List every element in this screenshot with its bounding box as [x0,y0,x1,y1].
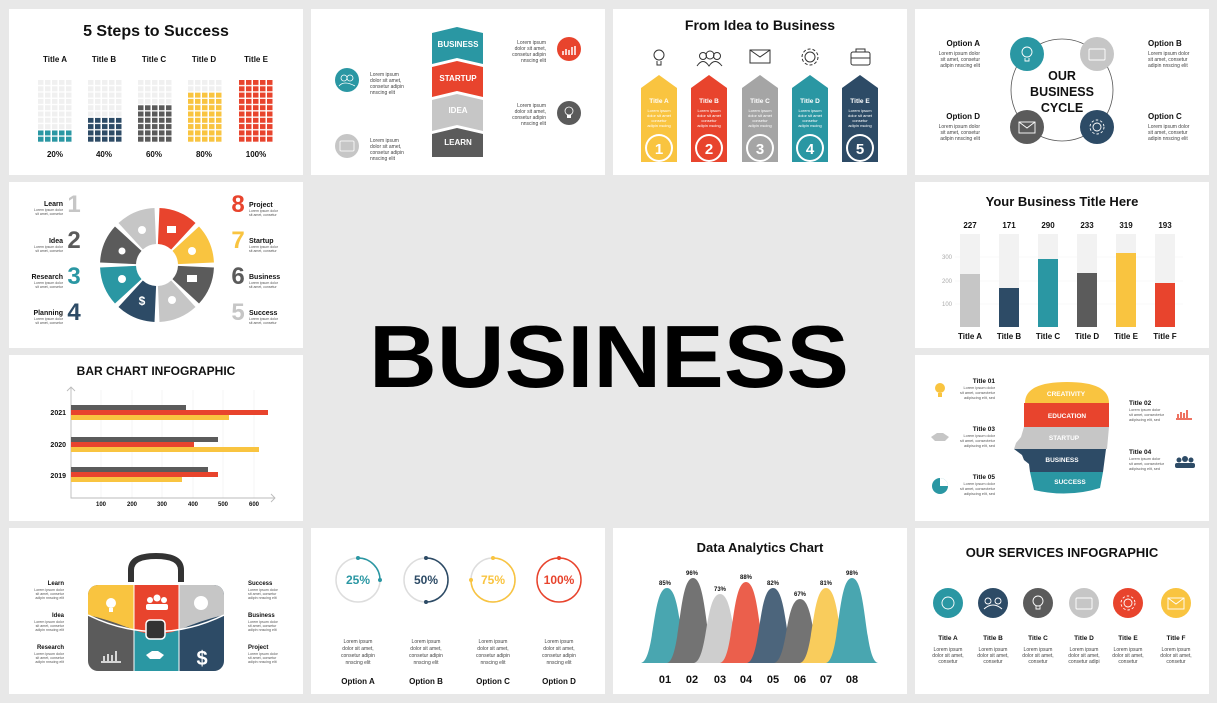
arrow columns: dolor sit amet [848,113,873,118]
panel: our services infographic: Lorem ipsum [979,647,1007,653]
panel: head infographic: Lorem ipsum dolor [1129,457,1161,461]
panel: your business title bar chart: 200 [942,279,953,285]
panel: briefcase: sit amet, consetur [248,656,277,660]
service icons [933,588,1191,618]
arrow columns: Lorem ipsum [848,108,872,113]
panel: data analytics chart: Data Analytics Chart [697,540,824,555]
panel: gear steps: Lorem ipsum dolor [34,208,64,212]
panel: our services infographic: Title A [938,635,958,642]
panel: head infographic [915,355,1209,521]
panel: gear steps: sit amet, consetur [249,285,277,289]
panel: percent rings: dolor sit amet, [477,646,509,652]
panel: business cycle: sit amet, consetur [941,57,980,63]
arrow columns: adipin nscing [647,123,671,128]
column titles [43,55,269,64]
panel: gear steps: sit amet, consetur [249,249,277,253]
panel: bar chart infographic [9,355,303,521]
panel: your business title bar chart: Title E [1114,332,1139,341]
panel: bar chart infographic: 200 [127,502,138,508]
labels [37,581,275,651]
panel: data analytics chart [613,528,907,694]
text blocks [370,72,404,96]
panel: percent rings: Option A [341,677,375,686]
head bands: STARTUP [1049,435,1080,442]
arrow columns: 5 [856,141,864,158]
panel: our services infographic: consetur adipi [1068,659,1100,665]
panel: percent rings: nnscing elit [480,660,506,666]
options: Option C [1148,112,1182,121]
labels: Learn [48,581,64,587]
panel: percent rings: 25% [346,573,370,587]
panel: gear steps: sit amet, consetur [35,212,64,216]
panel: chevron stack: dolor sit amet, [515,46,546,52]
panel: 5 steps to success [9,9,303,175]
column titles: Title D [192,55,216,64]
labels: Research [31,274,63,281]
panel: data analytics chart: 88% [740,575,753,581]
square grids [38,80,274,143]
chevrons: IDEA [448,106,468,115]
panel: head infographic: Lorem ipsum dolor [964,386,996,390]
heading: 5 steps: 5 Steps to Success [83,23,229,40]
arrow columns: dolor sit amet [647,113,672,118]
bars [71,405,268,482]
panel: briefcase: Lorem ipsum dolor [34,588,65,592]
labels: Startup [249,238,274,245]
panel: our services infographic: dolor sit amet, [1112,653,1144,659]
percent labels: 40% [96,150,112,159]
panel: data analytics chart: 04 [740,674,753,686]
panel: percent rings: Lorem ipsum [545,639,573,645]
line icons [654,49,870,66]
panel: head infographic: Lorem ipsum dolor [964,482,996,486]
handle [131,556,181,582]
labels: Business [248,613,275,619]
numbers left: 4 [67,299,81,326]
column titles: Title A [43,55,67,64]
text blocks: dolor sit amet, [370,78,401,84]
panel: percent rings: consetur adipin [476,653,510,659]
panel: head infographic: sit amet, consectetur [1129,462,1165,466]
panel: percent rings: consetur adipin [409,653,443,659]
briefcase body [88,585,224,671]
arrow columns: consetur [802,118,818,123]
numbers left: 7 [231,227,245,254]
options: Option A [947,39,980,48]
icon: people teal [335,68,359,92]
briefcase body: $ [196,648,208,670]
panel: business cycle: adipin nnscing elit [940,63,981,69]
arrow columns: adipin nscing [697,123,721,128]
panel: gear steps: Lorem ipsum dolor [34,281,64,285]
panel: gear steps: Lorem ipsum dolor [34,317,64,321]
panel: business cycle: adipin nnscing elit [1148,63,1188,69]
panel: percent rings: dolor sit amet, [410,646,442,652]
panel: bar chart infographic: 300 [157,502,168,508]
panel: business cycle: Lorem ipsum dolor [939,51,980,57]
panel: our services infographic: consetur [938,659,958,665]
panel: percent rings: consetur adipin [542,653,576,659]
panel: business cycle: Lorem ipsum dolor [1148,124,1190,130]
panel: briefcase: Lorem ipsum dolor [248,588,279,592]
panel: data analytics chart: 07 [820,674,832,686]
panel: business cycle: adipin nnscing elit [940,136,981,142]
panel: percent rings: 50% [414,573,438,587]
options: Option D [946,112,980,121]
icons [935,383,945,397]
panel: business cycle: sit amet, consetur [1148,57,1188,63]
chevrons: LEARN [444,138,472,147]
icon: chart red [557,37,581,61]
icon: bulb dark [557,101,581,125]
panel: your business title bar chart: Your Business Title Here [986,194,1138,209]
panel: our services infographic: Lorem ipsum [1070,647,1098,653]
panel: briefcase [9,528,303,694]
rings [336,558,581,602]
panel: business cycle: Lorem ipsum dolor [1148,51,1190,57]
panel: percent rings: nnscing elit [345,660,371,666]
panel: chevron stack: nnscing elit [521,58,547,64]
head bands: EDUCATION [1048,413,1086,420]
arrow columns: adipin nscing [748,123,772,128]
panel: your business title bar chart: 100 [942,302,953,308]
panel: data analytics chart: 82% [767,581,780,587]
panel: from idea to business [613,9,907,175]
panel: your business title bar chart: Title D [1075,332,1099,341]
head bands: BUSINESS [1045,457,1079,464]
panel: head infographic: sit amet, consectetur [1129,413,1165,417]
panel: our services infographic: dolor sit amet, [1068,653,1100,659]
panel: data analytics chart: 85% [659,581,672,587]
panel: chevron stack: dolor sit amet, [370,144,401,150]
labels: Business [249,274,280,281]
cycle title: CYCLE [1041,101,1083,115]
head bands [1014,382,1109,494]
panel: chevron stack: nnscing elit [370,156,396,162]
panel: briefcase: sit amet, consetur [248,624,277,628]
panel: head infographic: sit amet, consectetur [960,391,996,395]
arrow columns: consetur [651,118,667,123]
percent labels: 60% [146,150,162,159]
panel: our services infographic: consetur [1028,659,1048,665]
panel: bar chart infographic: 2019 [50,473,66,480]
panel: percent rings [311,528,605,694]
panel: your business title bar chart: Title C [1036,332,1060,341]
panel: percent rings: Lorem ipsum [412,639,440,645]
columns [960,234,1175,327]
head bands: CREATIVITY [1047,391,1086,398]
numbers left: 8 [231,191,245,218]
numbers left: 6 [231,263,245,290]
arrow columns: Lorem ipsum [748,108,772,113]
icon: briefcase gray [335,134,359,158]
panel: percent rings: nnscing elit [546,660,572,666]
panel: our services infographic: consetur [1166,659,1186,665]
panel: our services infographic: Title D [1074,635,1094,642]
panel: our services infographic: consetur [1118,659,1138,665]
panel: percent rings: Lorem ipsum [479,639,507,645]
panel: gear steps: sit amet, consetur [35,249,64,253]
panel: your business title bar chart: 227 [963,221,977,230]
labels: Success [249,310,278,317]
panel: our services infographic [915,528,1209,694]
column titles: Title E [244,55,269,64]
panel: business cycle: adipin nnscing elit [1148,136,1188,142]
center: BUSINESS title: BUSINESS [369,307,849,406]
panel: head infographic: adipiscing elit, sed [1129,467,1160,471]
panel: your business title bar chart: 300 [942,255,953,261]
arrow columns: 1 [655,141,663,158]
panel: percent rings: 100% [544,573,575,587]
panel: business cycle: sit amet, consetur [1148,130,1188,136]
arrow columns: Lorem ipsum [798,108,822,113]
panel: our services infographic: OUR SERVICES INFOGRAPHIC [966,545,1159,560]
panel: your business title bar chart: Title F [1153,332,1177,341]
labels [31,201,280,317]
panel: percent rings: 75% [481,573,505,587]
labels: Learn [44,201,63,208]
panel: data analytics chart: 67% [794,592,807,598]
panel: briefcase: sit amet, consetur [36,592,65,596]
arrow columns: dolor sit amet [697,113,722,118]
text blocks: nnscing elit [370,90,396,96]
chevrons: STARTUP [439,74,477,83]
panel: briefcase: adipin nnscing elit [248,628,277,632]
labels: Idea [52,613,65,619]
panel: head infographic: adipiscing elit, sed [964,396,995,400]
panel: gear steps: sit amet, consetur [35,321,64,325]
panel: bar chart infographic: 500 [218,502,229,508]
arrow columns: 3 [756,141,764,158]
panel: briefcase: adipin nnscing elit [248,660,277,664]
panel: our services infographic: dolor sit amet, [977,653,1009,659]
panel: data analytics chart: 73% [714,587,727,593]
arrow columns: Title B [699,98,719,105]
labels: Planning [33,310,63,317]
arrow columns: 2 [705,141,713,158]
heading: From Idea to Business [685,17,835,33]
panel: bar chart infographic: 2020 [50,442,66,449]
percent labels: 80% [196,150,212,159]
panel: chevron stack: dolor sit amet, [515,109,546,115]
chevrons [432,27,483,157]
heading: BAR CHART INFOGRAPHIC [77,364,236,378]
arrow columns: consetur [701,118,717,123]
panel: your business title bar chart [915,182,1209,348]
numbers left: 3 [67,263,81,290]
panel: our services infographic: dolor sit amet, [932,653,964,659]
panel: gear steps: Lorem ipsum dolor [249,209,279,213]
head bands: SUCCESS [1054,479,1086,486]
panel: data analytics chart: 08 [846,674,858,686]
cycle title: BUSINESS [1030,85,1094,99]
panel: gear steps: sit amet, consetur [249,321,277,325]
panel: percent rings: Option C [476,677,510,686]
arrow columns: Lorem ipsum [647,108,671,113]
panel: bar chart infographic: 400 [188,502,199,508]
panel: gear steps: Lorem ipsum dolor [249,281,279,285]
panel: gear steps: Lorem ipsum dolor [34,245,64,249]
numbers left [67,191,245,326]
panel: data analytics chart: 06 [794,674,806,686]
panel: data analytics chart: 02 [686,674,698,686]
panel: our services infographic: consetur [983,659,1003,665]
panel: data analytics chart: 03 [714,674,726,686]
titles: Title 01 [973,378,995,385]
panel: briefcase: sit amet, consetur [36,624,65,628]
panel: briefcase: adipin nnscing elit [35,660,64,664]
panel: your business title bar chart: 290 [1041,221,1055,230]
panel: percent rings: Option B [409,677,443,686]
panel: our services infographic: Lorem ipsum [934,647,962,653]
arrow columns: dolor sit amet [748,113,773,118]
bells [641,578,878,663]
arrow columns: Lorem ipsum [697,108,721,113]
panel: bar chart infographic: 2021 [50,410,66,417]
cycle nodes [1010,37,1114,144]
panel: gear steps [9,182,303,348]
arrow columns: consetur [852,118,868,123]
labels: Project [248,645,268,651]
panel: bar chart infographic: 600 [249,502,260,508]
panel: chevron stack: Lorem ipsum [517,40,546,46]
panel: chevron stack: consetur adipin [512,52,546,58]
panel: briefcase: adipin nnscing elit [35,628,64,632]
panel: your business title bar chart: 171 [1002,221,1016,230]
panel: your business title bar chart: 193 [1158,221,1172,230]
panel: your business title bar chart: 319 [1119,221,1133,230]
arrow columns: Title D [800,98,820,105]
panel: gear steps: sit amet, consetur [249,213,277,217]
panel: briefcase: Lorem ipsum dolor [34,652,65,656]
panel: our services infographic: Title B [983,635,1003,642]
panel: briefcase: sit amet, consetur [248,592,277,596]
panel: chevron stack: consetur adipin [370,150,404,156]
panel: chevron stack: Lorem ipsum [517,103,546,109]
arrow columns: 4 [806,141,815,158]
cycle title [1030,69,1094,115]
panel: percent rings: consetur adipin [341,653,375,659]
panel: gear steps: Lorem ipsum dolor [249,245,279,249]
panel: percent rings: nnscing elit [413,660,439,666]
titles: Title 02 [1129,400,1152,407]
numbers left: 5 [231,299,245,326]
arrow columns: consetur [752,118,768,123]
panel: data analytics chart: 01 [659,674,671,686]
panel: our services infographic: Lorem ipsum [1162,647,1190,653]
arrow columns: Title A [649,98,669,105]
arrow columns: dolor sit amet [798,113,823,118]
panel: briefcase: Lorem ipsum dolor [34,620,65,624]
arrow columns [641,75,878,162]
gear wheel [97,205,217,325]
panel: data analytics chart: 81% [820,581,833,587]
panel: briefcase: adipin nnscing elit [248,596,277,600]
chevrons: BUSINESS [438,40,479,49]
panel: briefcase: Lorem ipsum dolor [248,620,279,624]
panel: business cycle: sit amet, consetur [941,130,980,136]
panel: data analytics chart: 96% [686,571,699,577]
column titles: Title C [142,55,166,64]
panel: chevron stack: consetur adipin [512,115,546,121]
panel: gear steps: Lorem ipsum dolor [249,317,279,321]
arrow columns: Title E [850,98,870,105]
titles: Title 03 [973,426,995,433]
panel: briefcase: adipin nnscing elit [35,596,64,600]
numbers left: 2 [67,227,81,254]
panel: percent rings: Option D [542,677,576,686]
panel: percent rings: dolor sit amet, [342,646,374,652]
percent labels: 20% [47,150,63,159]
panel: chevron stack: Lorem ipsum [370,138,399,144]
options [946,39,1182,121]
cycle title: OUR [1048,69,1076,83]
panel: briefcase: Lorem ipsum dolor [248,652,279,656]
panel: percent rings: Lorem ipsum [344,639,372,645]
panel: head infographic: adipiscing elit, sed [1129,418,1160,422]
labels: Project [249,202,273,209]
text blocks: Lorem ipsum [370,72,399,78]
arrow columns: adipin nscing [848,123,872,128]
panel: our services infographic: Lorem ipsum [1024,647,1052,653]
panel: head infographic: adipiscing elit, sed [964,444,995,448]
panel: bar chart infographic: 100 [96,502,107,508]
ring [1011,39,1113,141]
text blocks: consetur adipin [370,84,404,90]
panel: head infographic: Lorem ipsum dolor [1129,408,1161,412]
labels: Idea [49,238,63,245]
labels: Success [248,581,273,587]
panel: gear steps: sit amet, consetur [35,285,64,289]
panel: our services infographic: Title E [1118,635,1138,642]
labels: Research [37,645,64,651]
panel: our services infographic: Title C [1028,635,1048,642]
panel: head infographic: sit amet, consectetur [960,487,996,491]
panel: our services infographic: dolor sit amet, [1160,653,1192,659]
panel: head infographic: sit amet, consectetur [960,439,996,443]
panel: chevron stack: nnscing elit [521,121,547,127]
gear wheel: $ [139,294,146,308]
panel: business cycle [915,9,1209,175]
titles [973,378,1152,481]
panel: chevron stack [311,9,605,175]
percent labels: 100% [246,150,266,159]
panel: our services infographic: dolor sit amet, [1022,653,1054,659]
titles: Title 05 [973,474,995,481]
options: Option B [1148,39,1182,48]
panel: your business title bar chart: Title A [958,332,982,341]
panel: head infographic: Lorem ipsum dolor [964,434,996,438]
panel: your business title bar chart: Title B [997,332,1021,341]
panel: your business title bar chart: 233 [1080,221,1094,230]
panel: data analytics chart: 98% [846,571,859,577]
arrow columns: adipin nscing [798,123,822,128]
numbers left: 1 [67,191,81,218]
panel: briefcase: sit amet, consetur [36,656,65,660]
arrow columns: Title C [750,98,770,105]
panel: head infographic: adipiscing elit, sed [964,492,995,496]
column titles: Title B [92,55,116,64]
panel: percent rings: dolor sit amet, [543,646,575,652]
panel: data analytics chart: 05 [767,674,779,686]
panel: business cycle: Lorem ipsum dolor [939,124,980,130]
titles: Title 04 [1129,449,1152,456]
percent labels [47,150,266,159]
panel: our services infographic: Title F [1166,635,1186,642]
axes [67,387,275,502]
panel: our services infographic: Lorem ipsum [1114,647,1142,653]
